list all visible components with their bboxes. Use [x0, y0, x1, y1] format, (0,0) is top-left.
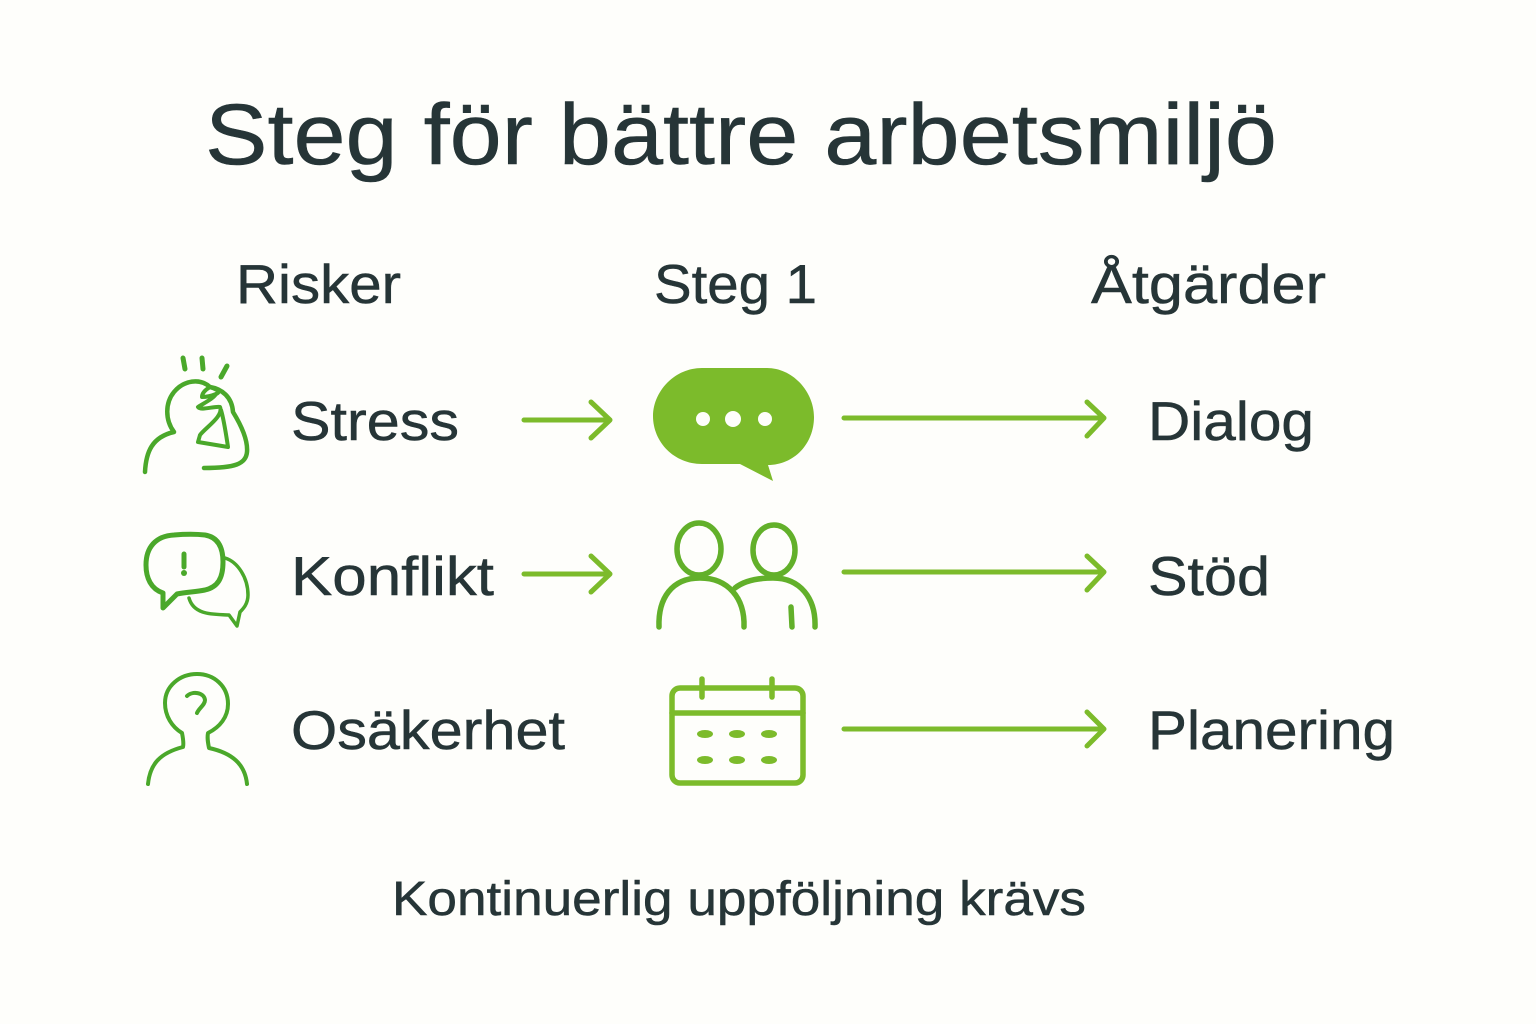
footer text: Kontinuerlig uppföljning krävs — [392, 873, 1086, 926]
column heading: Steg 1: Steg 1 — [654, 253, 817, 315]
icon: person with question mark — [148, 674, 247, 784]
label: Stress: Stress — [291, 390, 459, 452]
icon: filled speech bubble — [653, 368, 814, 481]
arrow: to Planering — [844, 712, 1104, 746]
arrow: Konflikt to support icon — [524, 556, 610, 592]
arrow: to Stöd — [844, 556, 1104, 590]
icon: stressed person — [145, 358, 247, 472]
icon: two people — [659, 523, 815, 627]
label: Konflikt: Konflikt — [291, 545, 494, 607]
icon: calendar — [672, 679, 803, 783]
icon: conflict speech bubbles — [146, 534, 248, 626]
arrow: Stress to dialog icon — [524, 402, 610, 438]
label: Stöd: Stöd — [1148, 545, 1270, 607]
label: Planering: Planering — [1148, 699, 1395, 761]
column heading: Risker: Risker — [236, 253, 401, 315]
column heading: Åtgärder: Åtgärder — [1091, 253, 1326, 315]
title: Steg för bättre arbetsmiljö — [205, 87, 1277, 183]
label: Dialog: Dialog — [1148, 390, 1314, 452]
label: Osäkerhet: Osäkerhet — [291, 699, 565, 761]
arrow: to Dialog — [844, 402, 1104, 436]
